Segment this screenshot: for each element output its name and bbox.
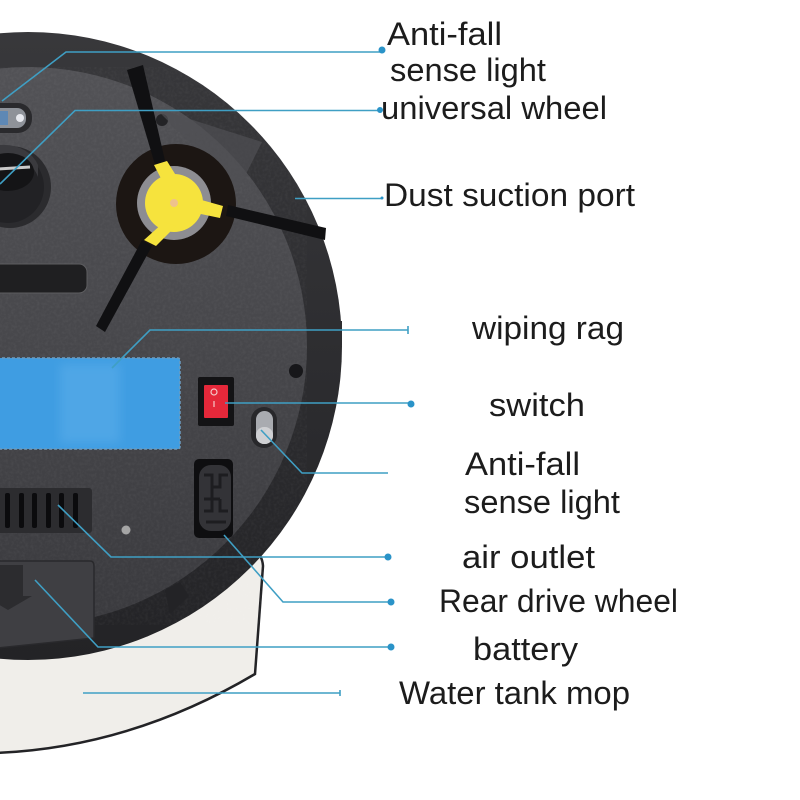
plate texture: [0, 67, 307, 625]
line: rear drive wheel: [224, 535, 391, 602]
line: wiping rag: [112, 326, 408, 368]
label: switch: switch: [489, 387, 585, 423]
rag shading: [60, 364, 120, 443]
lower hole: [289, 364, 303, 378]
plate wedge highlight: [155, 108, 262, 190]
screw: [122, 526, 130, 534]
line: water tank mop: [83, 690, 340, 696]
rear drive wheel: [194, 459, 233, 538]
line: battery: [35, 580, 391, 647]
gray ring: [137, 166, 211, 240]
brush bristles: [96, 65, 326, 332]
line: air outlet: [58, 505, 388, 557]
label: water tank mop: Water tank mop: [399, 675, 630, 711]
red rocker switch: [198, 377, 234, 426]
label: anti-fall sense light top: Anti-fall: [387, 16, 502, 52]
water tank mop: [0, 548, 263, 753]
brush disc: [116, 144, 236, 264]
battery cover: [0, 561, 94, 648]
suction slot: [0, 264, 87, 293]
label: anti-fall lower: Anti-fall: [465, 446, 580, 482]
blue wiping rag: [0, 358, 180, 449]
label: sense light top: sense light: [390, 52, 546, 88]
air outlet: [0, 488, 92, 533]
label: dust suction port: Dust suction port: [384, 177, 635, 213]
label: air outlet: air outlet: [462, 539, 595, 575]
rim mounting hole: [156, 114, 168, 126]
rim step notch: [330, 321, 342, 345]
inner plate: [0, 67, 307, 625]
anti-fall sensor top: [0, 103, 32, 133]
line: anti-fall top: [2, 52, 382, 101]
callout dots: [377, 46, 414, 650]
line: universal wheel: [0, 110, 380, 184]
label: sense light lower: sense light: [464, 484, 620, 520]
line: switch: [225, 402, 410, 404]
universal wheel: [0, 145, 51, 228]
yellow hub: [144, 161, 223, 246]
mop clip: [165, 582, 189, 614]
anti-fall sensor lower: [251, 407, 277, 448]
line: anti-fall lower: [261, 430, 388, 473]
side brush: [96, 65, 326, 332]
label: wiping rag: wiping rag: [471, 310, 624, 346]
line: dust suction port: [295, 198, 382, 200]
outer rim: [0, 32, 342, 660]
callout lines: [0, 52, 410, 696]
label: rear drive wheel: Rear drive wheel: [439, 583, 678, 619]
hub center: [170, 199, 178, 207]
label: battery: battery: [473, 631, 578, 667]
label: universal wheel: universal wheel: [381, 90, 607, 126]
robot vacuum body: [0, 32, 342, 660]
